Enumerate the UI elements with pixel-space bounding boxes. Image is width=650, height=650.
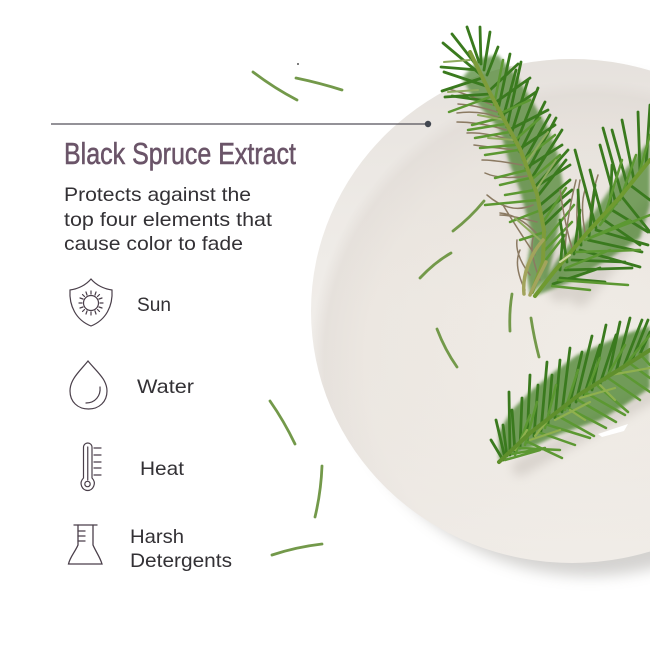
description: cause color to fade (64, 233, 243, 255)
icon: water drop (70, 361, 107, 409)
sprig shadows (510, 130, 650, 468)
label: harsh detergents: Harsh (130, 526, 184, 548)
sprig: left branch (441, 27, 574, 295)
label: harsh detergents (130, 526, 232, 572)
icon: thermometer (81, 443, 101, 490)
label: sun: Sun (137, 294, 171, 316)
icon: flask (68, 525, 102, 564)
icon: sun shield (70, 279, 112, 326)
sprig: lower branch (491, 318, 650, 462)
description (64, 184, 273, 255)
label: water: Water (137, 376, 195, 398)
label: harsh detergents: Detergents (130, 550, 232, 572)
plate (311, 59, 650, 576)
description: top four elements that (64, 209, 273, 231)
title: Black Spruce Extract (64, 136, 296, 171)
fallen needles (253, 63, 539, 555)
leader line (51, 121, 431, 127)
sprig: right branch (535, 105, 650, 296)
description: Protects against the (64, 184, 251, 206)
label: heat: Heat (140, 458, 185, 480)
